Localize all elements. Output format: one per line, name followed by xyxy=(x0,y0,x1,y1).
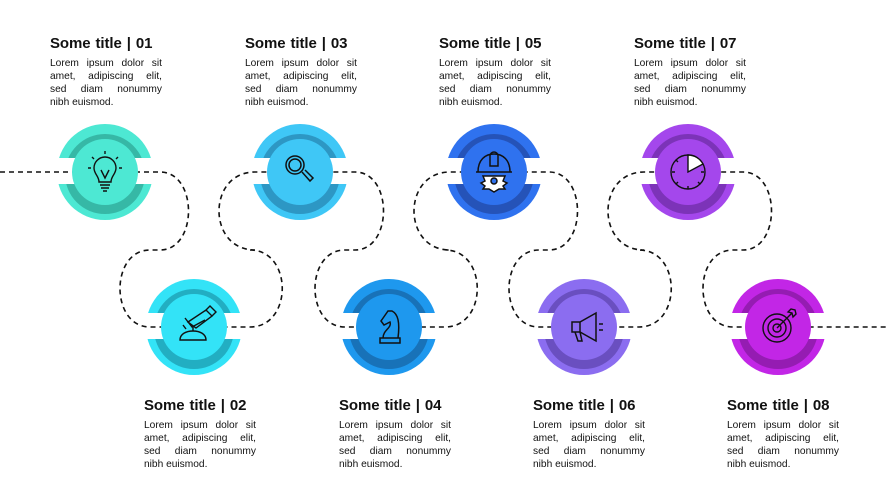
circle 05 xyxy=(444,124,544,220)
text: 02 xyxy=(144,397,256,470)
text: 03: Some title | 03 xyxy=(245,35,347,52)
circle 08 xyxy=(728,279,828,375)
text: 07: Some title | 07 xyxy=(634,35,736,52)
text: 02: Lorem ipsum dolor sit xyxy=(144,420,256,431)
text: 08: amet, adipiscing elit, xyxy=(727,433,839,444)
text: 08: nibh euismod. xyxy=(727,459,790,470)
text: 05: Some title | 05 xyxy=(439,35,541,52)
text: 08: sed diam nonummy xyxy=(727,446,839,457)
text: 05: nibh euismod. xyxy=(439,97,502,108)
text: 06: amet, adipiscing elit, xyxy=(533,433,645,444)
circle 07 xyxy=(638,124,738,220)
text: 03: Lorem ipsum dolor sit xyxy=(245,58,357,69)
text: 05 xyxy=(439,35,551,108)
text: 08: Lorem ipsum dolor sit xyxy=(727,420,839,431)
text: 05: sed diam nonummy xyxy=(439,84,551,95)
text: 03: nibh euismod. xyxy=(245,97,308,108)
text: 07: nibh euismod. xyxy=(634,97,697,108)
text: 06: sed diam nonummy xyxy=(533,446,645,457)
text: 04: Some title | 04 xyxy=(339,397,441,414)
circle 06 xyxy=(534,279,634,375)
text: 08 xyxy=(727,397,839,470)
text: 01: nibh euismod. xyxy=(50,97,113,108)
circle 02 xyxy=(144,279,244,375)
inner 05 with helmet icon xyxy=(461,139,527,205)
text: 02: Some title | 02 xyxy=(144,397,246,414)
text: 05: Lorem ipsum dolor sit xyxy=(439,58,551,69)
text: 06: nibh euismod. xyxy=(533,459,596,470)
inner 06 with megaphone icon xyxy=(551,294,617,360)
text: 04: amet, adipiscing elit, xyxy=(339,433,451,444)
text: 04: Lorem ipsum dolor sit xyxy=(339,420,451,431)
inner 08 with target icon xyxy=(745,294,811,360)
text: 02: sed diam nonummy xyxy=(144,446,256,457)
text: 04 xyxy=(339,397,451,470)
text: 08: Some title | 08 xyxy=(727,397,829,414)
text: 06 xyxy=(533,397,645,470)
circle 03 xyxy=(250,124,350,220)
text: 01: amet, adipiscing elit, xyxy=(50,71,162,82)
text: 07: amet, adipiscing elit, xyxy=(634,71,746,82)
text: 04: sed diam nonummy xyxy=(339,446,451,457)
text: 01: sed diam nonummy xyxy=(50,84,162,95)
inner 07 with timer icon xyxy=(655,139,721,205)
inner 01 with bulb icon xyxy=(72,139,138,205)
text: 04: nibh euismod. xyxy=(339,459,402,470)
text: 06: Lorem ipsum dolor sit xyxy=(533,420,645,431)
dashed path xyxy=(0,172,889,327)
circle 01 xyxy=(55,124,155,220)
text: 07 xyxy=(634,35,746,108)
circle 04 xyxy=(339,279,439,375)
text: 03 xyxy=(245,35,357,108)
text: 03: amet, adipiscing elit, xyxy=(245,71,357,82)
inner 03 with magnifier icon xyxy=(267,139,333,205)
text: 03: sed diam nonummy xyxy=(245,84,357,95)
text: 07: sed diam nonummy xyxy=(634,84,746,95)
text: 06: Some title | 06 xyxy=(533,397,635,414)
text: 02: nibh euismod. xyxy=(144,459,207,470)
inner 04 with knight icon xyxy=(356,294,422,360)
text: 01: Lorem ipsum dolor sit xyxy=(50,58,162,69)
text: 05: amet, adipiscing elit, xyxy=(439,71,551,82)
text: 02: amet, adipiscing elit, xyxy=(144,433,256,444)
text: 07: Lorem ipsum dolor sit xyxy=(634,58,746,69)
text: 01: Some title | 01 xyxy=(50,35,152,52)
inner 02 with microscope icon xyxy=(161,294,227,360)
text: 01 xyxy=(50,35,162,108)
